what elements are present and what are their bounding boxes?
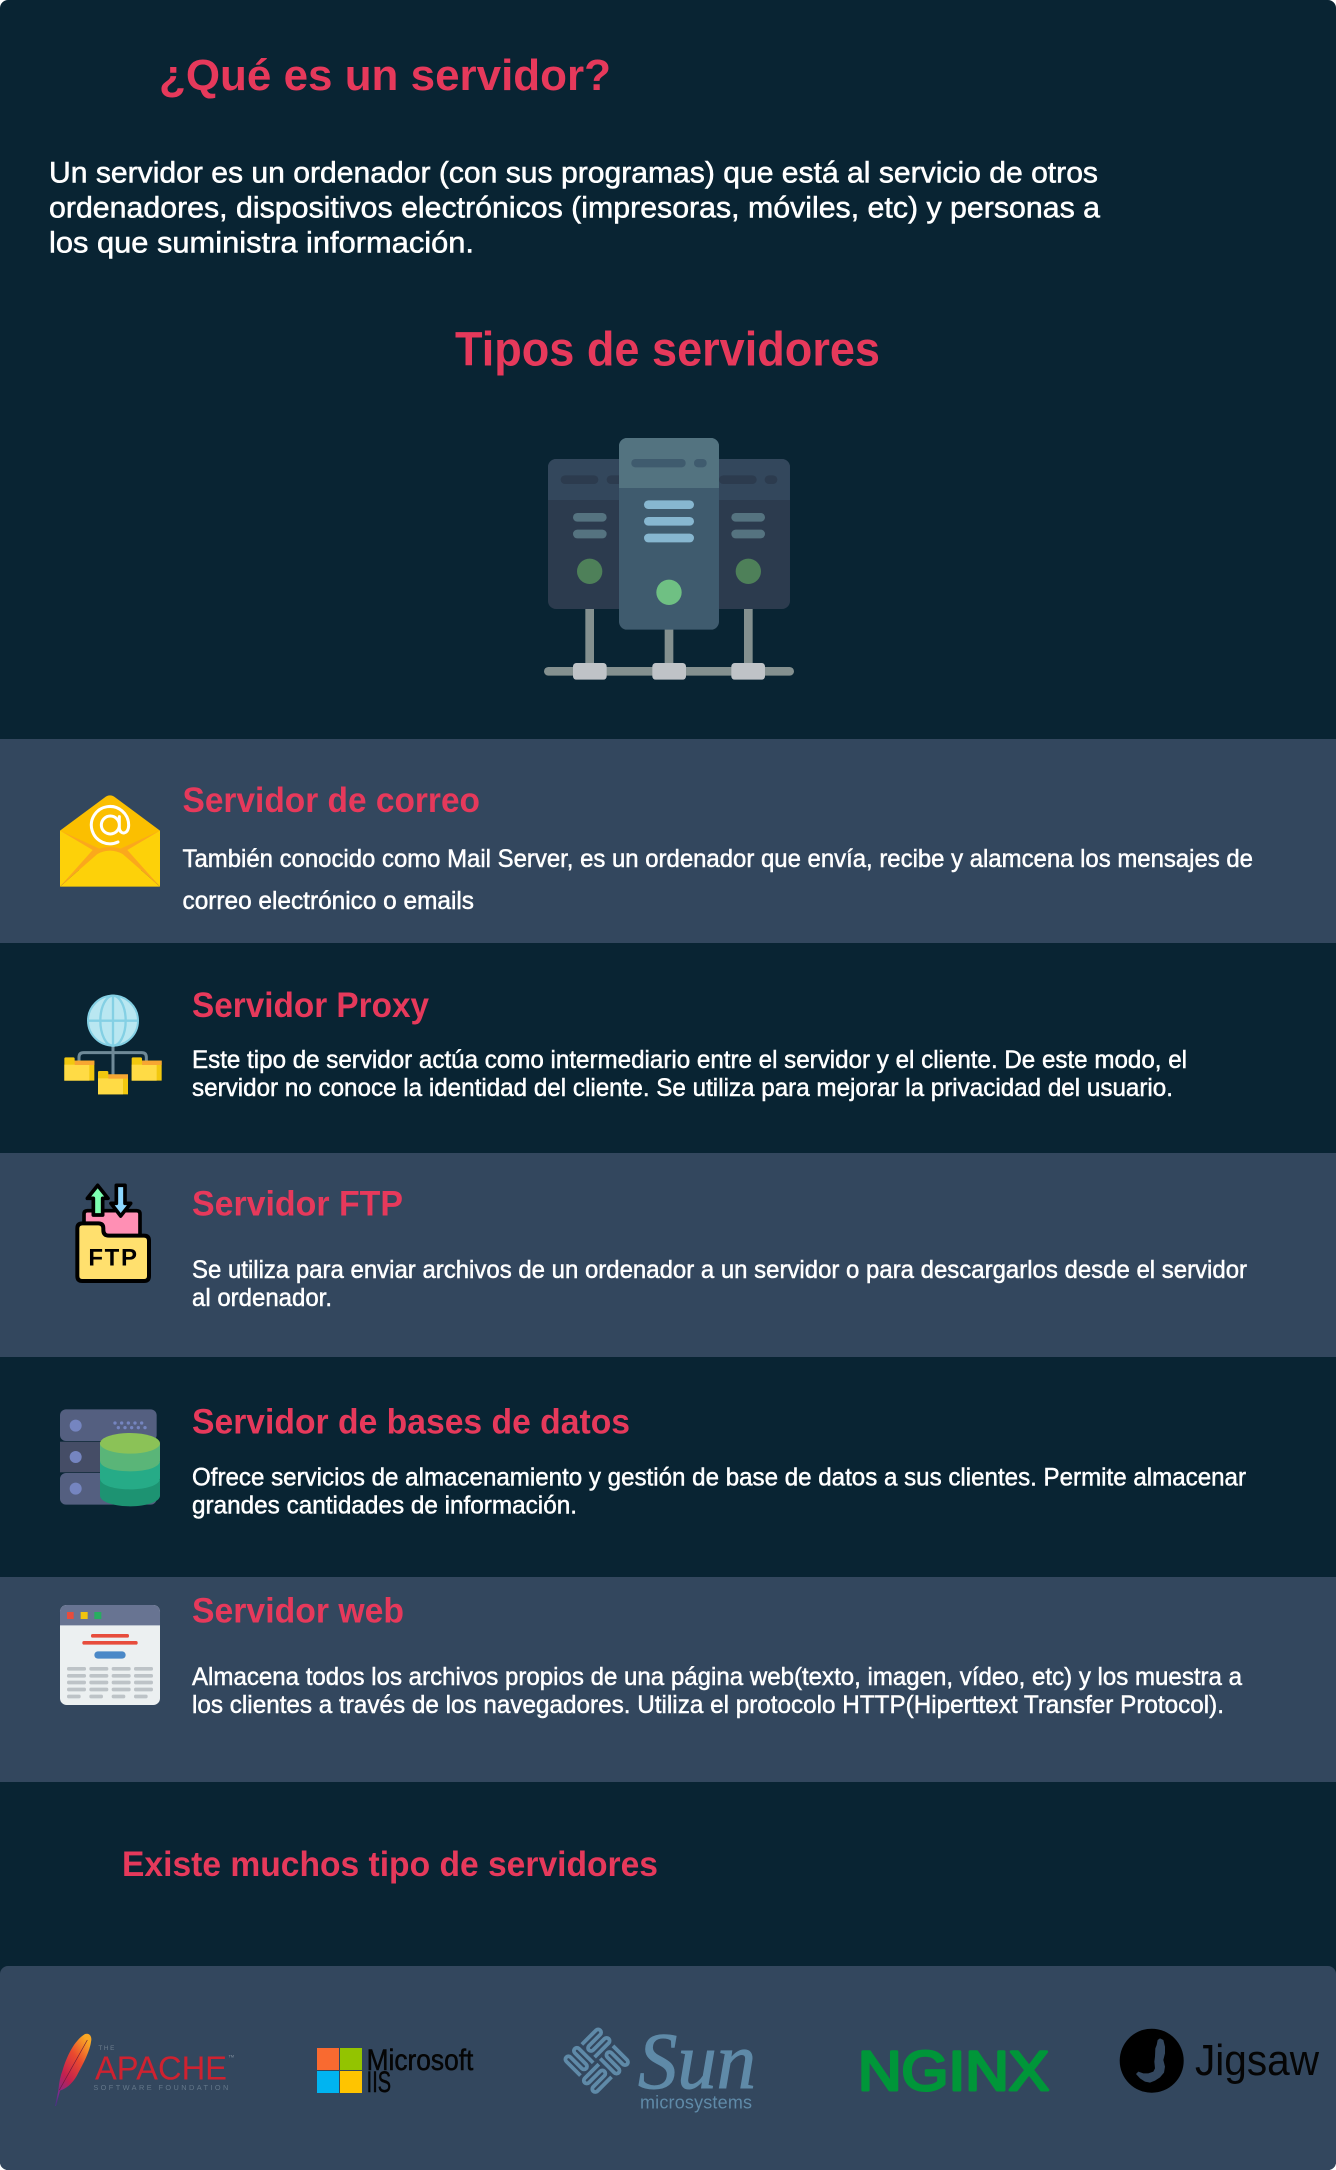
- logo: apache: THE: [98, 2045, 114, 2052]
- panel: servidor proxy: [64, 986, 1187, 1102]
- text: web: [192, 1663, 1242, 1719]
- text: bases de datos: grandes cantidades de información.: [192, 1492, 577, 1520]
- panel: servidor de bases de datos: [60, 1402, 1246, 1520]
- icon: servers on network: [544, 438, 794, 680]
- intro paragraph: Un servidor es un ordenador (con sus programas) que está al servicio de otros: [49, 156, 1098, 190]
- heading: servidor ftp: Servidor FTP: [192, 1184, 403, 1224]
- intro paragraph: [49, 156, 1100, 260]
- heading: servidor de bases de datos: Servidor de bases de datos: [192, 1402, 630, 1442]
- text: proxy: [192, 1046, 1187, 1102]
- text: correo: [182, 845, 1253, 915]
- intro paragraph: los que suministra información.: [49, 226, 474, 260]
- text: web: los clientes a través de los navegadores. Utiliza el protocolo HTTP(Hiperttext Transfer Protocol).: [192, 1691, 1224, 1719]
- logo: apache: APACHE: [95, 2050, 227, 2087]
- text: bases de datos: Ofrece servicios de almacenamiento y gestión de base de datos a sus clientes. Permite almacenar: [192, 1464, 1246, 1492]
- icon: database rack: [60, 1409, 160, 1506]
- icon: browser window: [60, 1605, 160, 1705]
- text: web: Almacena todos los archivos propios de una página web(texto, imagen, vídeo, etc) y los muestra a: [192, 1663, 1242, 1691]
- heading: existe muchos tipos: Existe muchos tipo de servidores: [122, 1845, 658, 1884]
- logo: microsoft iis: [317, 2044, 473, 2099]
- panel: servidor web: [0, 1577, 1336, 1782]
- icon: ftp folder: FTP: [88, 1244, 137, 1271]
- logo: jigsaw: Jigsaw: [1195, 2036, 1319, 2085]
- panel: server logos: [0, 1966, 1336, 2170]
- text: ftp: Se utiliza para enviar archivos de un ordenador a un servidor o para descargarlos desde el servidor: [192, 1256, 1247, 1284]
- icon: envelope: [60, 795, 160, 887]
- text: ftp: [192, 1256, 1247, 1312]
- panel: servidor ftp: [0, 1153, 1336, 1357]
- logo: apache: [55, 2034, 473, 2106]
- heading: servidor web: Servidor web: [192, 1592, 404, 1630]
- text: correo: correo electrónico o emails: [182, 887, 474, 915]
- logo: jigsaw: [1120, 2029, 1319, 2093]
- logo: microsoft iis: IIS: [367, 2066, 391, 2099]
- logo: sun microsystems: microsystems: [640, 2092, 752, 2112]
- text: proxy: Este tipo de servidor actúa como intermediario entre el servidor y el cliente. De este modo, el: [192, 1046, 1187, 1074]
- heading: servidor de correo: Servidor de correo: [182, 781, 480, 820]
- logo: microsoft iis: Microsoft: [367, 2044, 473, 2077]
- panel: servidor de correo: [0, 739, 1336, 943]
- heading: servidor proxy: Servidor Proxy: [192, 986, 430, 1025]
- logo: nginx: NGINX: [858, 2039, 1049, 2102]
- text: proxy: servidor no conoce la identidad del cliente. Se utiliza para mejorar la privacidad del usuario.: [192, 1074, 1173, 1102]
- logo: sun microsystems: Sun: [638, 2018, 756, 2106]
- title: ¿Qué es un servidor?: [159, 51, 611, 100]
- logo: sun microsystems: [563, 2018, 756, 2112]
- logo: apache: SOFTWARE FOUNDATION: [93, 2083, 228, 2092]
- icon: ftp folder: [77, 1185, 149, 1281]
- icon: globe with folders: [64, 996, 162, 1094]
- text: correo: También conocido como Mail Server, es un ordenador que envía, recibe y alamcena los mensajes de: [182, 845, 1253, 873]
- intro paragraph: ordenadores, dispositivos electrónicos (impresoras, móviles, etc) y personas a: [49, 192, 1100, 224]
- heading: tipos de servidores: Tipos de servidores: [455, 324, 880, 376]
- text: bases de datos: [192, 1464, 1246, 1520]
- text: ftp: al ordenador.: [192, 1284, 332, 1312]
- logo: apache: TM: [229, 2054, 234, 2058]
